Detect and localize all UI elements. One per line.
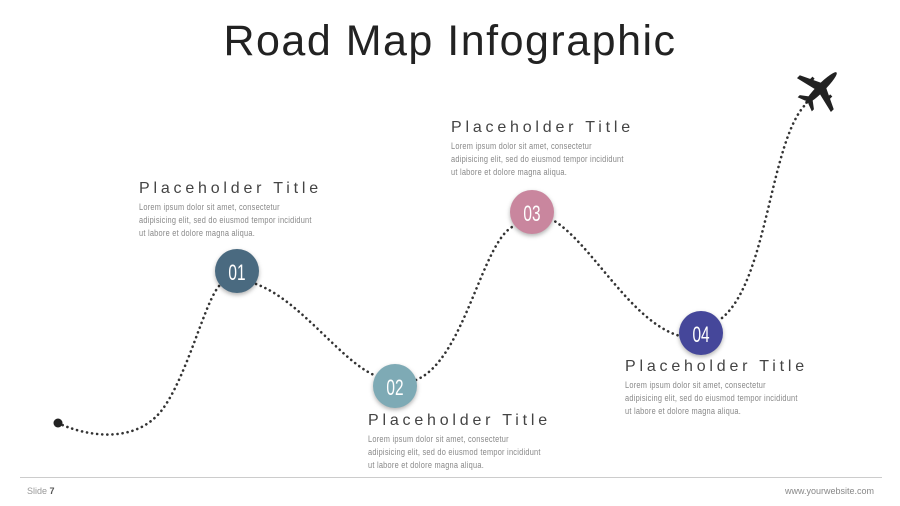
text block 03: Placeholder Title <box>451 119 634 136</box>
dotted route <box>58 104 806 435</box>
text block 01 <box>139 180 322 238</box>
start dot <box>54 418 62 428</box>
text block 01: Lorem ipsum dolor sit amet, consectetur <box>139 202 280 212</box>
milestone 01 <box>215 249 259 293</box>
milestone 02 <box>373 364 417 408</box>
text block 02: adipisicing elit, sed do eiusmod tempor incididunt <box>368 447 541 457</box>
milestone 04: 04 <box>692 323 710 348</box>
icon: airplane <box>788 55 854 121</box>
text block 02: Lorem ipsum dolor sit amet, consectetur <box>368 434 509 444</box>
milestone 03: 03 <box>523 202 541 227</box>
text block 03 <box>451 119 634 177</box>
text block 04: adipisicing elit, sed do eiusmod tempor incididunt <box>625 393 798 403</box>
milestone 03 <box>510 190 554 234</box>
text block 01: ut labore et dolore magna aliqua. <box>139 228 255 238</box>
footer: slide number: Slide 7 <box>27 486 55 496</box>
footer: website: www.yourwebsite.com <box>785 486 874 496</box>
text block 04: Lorem ipsum dolor sit amet, consectetur <box>625 380 766 390</box>
text block 04: ut labore et dolore magna aliqua. <box>625 406 741 416</box>
text block 02: Placeholder Title <box>368 412 551 429</box>
text block 03: Lorem ipsum dolor sit amet, consectetur <box>451 141 592 151</box>
title: Road Map Infographic <box>223 17 677 65</box>
text block 03: ut labore et dolore magna aliqua. <box>451 167 567 177</box>
text block 02 <box>368 412 551 470</box>
milestone 01: 01 <box>228 261 246 286</box>
text block 02: ut labore et dolore magna aliqua. <box>368 460 484 470</box>
text block 01: Placeholder Title <box>139 180 322 197</box>
text block 01: adipisicing elit, sed do eiusmod tempor incididunt <box>139 215 312 225</box>
milestone 04 <box>679 311 723 355</box>
text block 04: Placeholder Title <box>625 358 808 375</box>
text block 03: adipisicing elit, sed do eiusmod tempor incididunt <box>451 154 624 164</box>
milestone 02: 02 <box>386 376 404 401</box>
text block 04 <box>625 358 808 416</box>
